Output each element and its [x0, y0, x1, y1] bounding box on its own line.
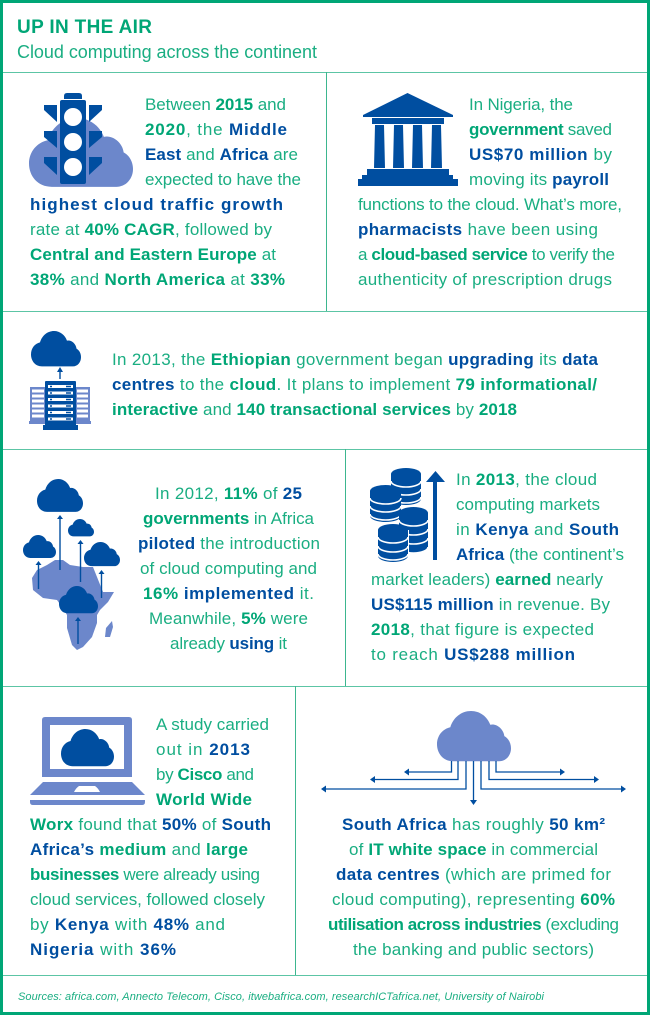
text: South African businesses: A study carried: [156, 715, 269, 734]
text: Ethiopia: interactive and 140 transactional services by 2018: [112, 400, 517, 419]
text: Nigeria: moving its payroll: [469, 170, 609, 189]
icon: laptop with cloud: [30, 717, 145, 805]
icon: traffic light with cloud: [29, 93, 133, 187]
text: traffic growth: 38% and North America at 33%: [30, 270, 285, 289]
text: South African businesses: out in 2013: [156, 740, 250, 759]
text: Nigeria: US$70 million by: [469, 145, 612, 164]
title: UP IN THE AIR: [17, 17, 152, 38]
text: traffic growth: Between 2015 and: [145, 95, 286, 114]
text: Nigeria: authenticity of prescription drugs: [358, 270, 612, 289]
text: Kenya and South Africa markets: to reach US$288 million: [371, 645, 575, 664]
text: South African businesses: Worx found that 50% of South: [30, 815, 271, 834]
panel: Nigeria: [358, 93, 622, 289]
panel: Ethiopia: [29, 331, 599, 430]
text: South African businesses: cloud services, followed closely: [30, 890, 266, 909]
text: Nigeria: functions to the cloud. What’s more,: [358, 195, 622, 214]
text: IT white space: [328, 815, 619, 959]
text: Kenya and South Africa markets: 2018, that figure is expected: [371, 620, 594, 639]
text: South African businesses: businesses were already using: [30, 865, 260, 884]
text: Kenya and South Africa markets: US$115 million in revenue. By: [371, 595, 610, 614]
text: IT white space: the banking and public sectors): [353, 940, 594, 959]
text: African governments: In 2012, 11% of 25: [155, 484, 302, 503]
text: traffic growth: East and Africa are: [145, 145, 298, 164]
text: Ethiopia: [112, 350, 599, 419]
icon: government building: [358, 93, 458, 186]
text: South African businesses: by Kenya with 48% and: [30, 915, 225, 934]
text: IT white space: data centres (which are primed for: [336, 865, 611, 884]
text: African governments: 16% implemented it.: [143, 584, 314, 603]
text: traffic growth: [30, 95, 301, 289]
text: Kenya and South Africa markets: in Kenya and South: [456, 520, 619, 539]
text: African governments: governments in Africa: [143, 509, 315, 528]
text: Nigeria: [358, 95, 622, 289]
text: African governments: already using it: [170, 634, 287, 653]
panel: IT white space: [321, 711, 626, 959]
text: traffic growth: expected to have the: [145, 170, 301, 189]
text: Ethiopia: In 2013, the Ethiopian government began upgrading its data: [112, 350, 599, 369]
title block: [17, 17, 317, 62]
text: Kenya and South Africa markets: In 2013, the cloud: [456, 470, 597, 489]
text: traffic growth: highest cloud traffic growth: [30, 195, 283, 214]
icon: coin stacks and arrow: [370, 468, 445, 563]
panel: Kenya and South Africa markets: [370, 468, 624, 664]
text: African governments: piloted the introduction: [138, 534, 320, 553]
text: Kenya and South Africa markets: Africa (the continent’s: [456, 545, 624, 564]
text: African governments: of cloud computing and: [140, 559, 317, 578]
text: IT white space: utilisation across industries (excluding: [328, 915, 619, 934]
text: IT white space: cloud computing), representing 60%: [332, 890, 615, 909]
text: African governments: Meanwhile, 5% were: [149, 609, 308, 628]
panel: traffic growth: [29, 93, 301, 289]
subtitle: Cloud computing across the continent: [17, 42, 317, 62]
text: South African businesses: [30, 715, 271, 959]
text: Kenya and South Africa markets: computing markets: [456, 495, 600, 514]
text: Nigeria: In Nigeria, the: [469, 95, 573, 114]
panel: African governments: [23, 479, 320, 653]
text: traffic growth: Central and Eastern Europe at: [30, 245, 276, 264]
text: South African businesses: by Cisco and: [156, 765, 254, 784]
text: South African businesses: Africa’s medium and large: [30, 840, 248, 859]
text: Kenya and South Africa markets: [371, 470, 624, 664]
text: Kenya and South Africa markets: market leaders) earned nearly: [371, 570, 604, 589]
text: IT white space: South Africa has roughly 50 km²: [342, 815, 605, 834]
text: South African businesses: Nigeria with 36%: [30, 940, 176, 959]
text: Nigeria: pharmacists have been using: [358, 220, 598, 239]
panel: South African businesses: [30, 715, 271, 959]
text: traffic growth: rate at 40% CAGR, followed by: [30, 220, 272, 239]
icon: cloud and servers: [29, 331, 91, 430]
text: Nigeria: government saved: [469, 120, 612, 139]
text: Nigeria: a cloud-based service to verify the: [358, 245, 615, 264]
text: Ethiopia: centres to the cloud. It plans to implement 79 informational/: [112, 375, 597, 394]
icon: Africa map with clouds: [23, 479, 120, 650]
text: traffic growth: 2020, the Middle: [145, 120, 287, 139]
text: IT white space: of IT white space in commercial: [349, 840, 598, 859]
icon: cloud with branching arrows: [321, 711, 626, 805]
text: South African businesses: World Wide: [156, 790, 252, 809]
sources: Sources: africa.com, Annecto Telecom, Cisco, itwebafrica.com, researchICTafrica.net, University of Nairobi: [18, 991, 545, 1003]
text: African governments: [138, 484, 320, 653]
